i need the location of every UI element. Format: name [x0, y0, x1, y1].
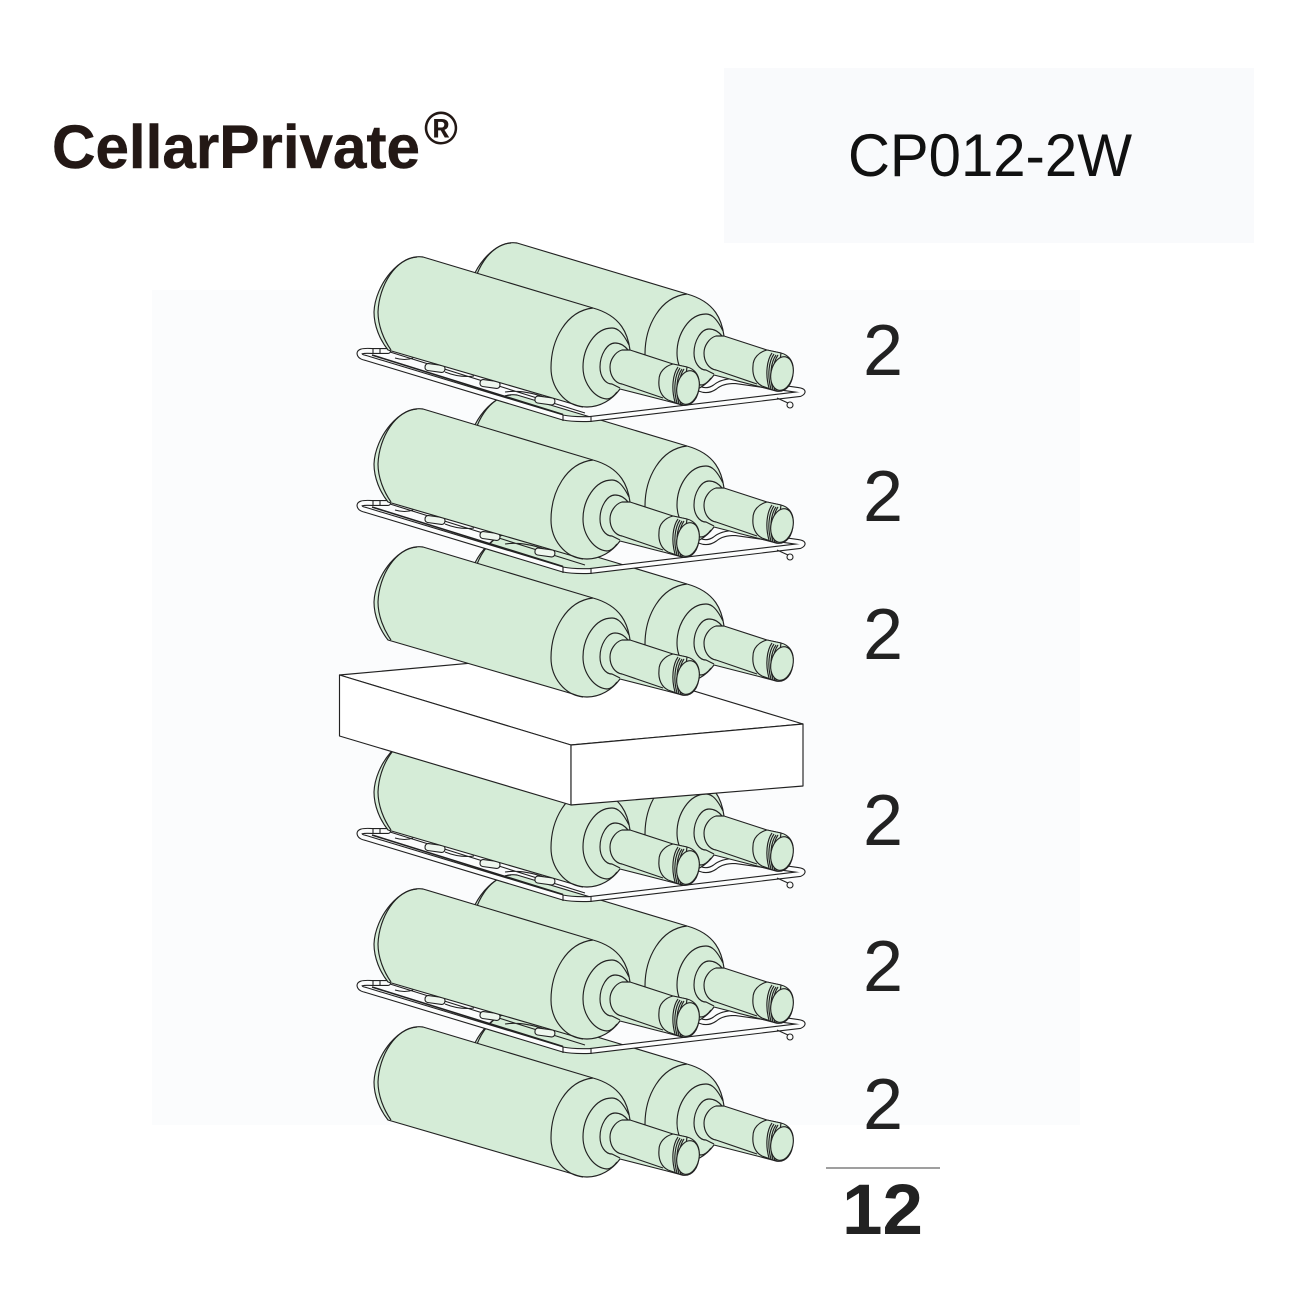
bottle counts per shelf: 2	[863, 457, 903, 537]
bottle counts per shelf	[863, 311, 903, 1145]
bottle counts per shelf: 2	[863, 1065, 903, 1145]
logo: CellarPrivate: CellarPrivate	[52, 113, 420, 181]
background panel: rack diagram	[152, 290, 1080, 1125]
total count: 12	[842, 1171, 923, 1250]
shelf 4: two bottles on wire rack	[360, 723, 803, 902]
background panel: header model box	[724, 68, 1254, 243]
total rule	[826, 1167, 940, 1169]
shelf 5: two bottles on wire rack	[360, 875, 803, 1054]
shelf 3: two bottles	[374, 533, 796, 697]
bottle counts per shelf: 2	[863, 311, 903, 391]
divider block between zones	[340, 654, 803, 805]
logo: CellarPrivate: ®	[424, 102, 458, 154]
bottle counts per shelf: 2	[863, 595, 903, 675]
shelf 2: two bottles on wire rack	[360, 395, 803, 574]
shelf 6: two bottles	[374, 1013, 796, 1177]
model number: CP012-2W	[848, 122, 1132, 189]
bottle counts per shelf: 2	[863, 781, 903, 861]
bottle counts per shelf: 2	[863, 927, 903, 1007]
shelf 1: two bottles on wire rack	[360, 243, 803, 422]
